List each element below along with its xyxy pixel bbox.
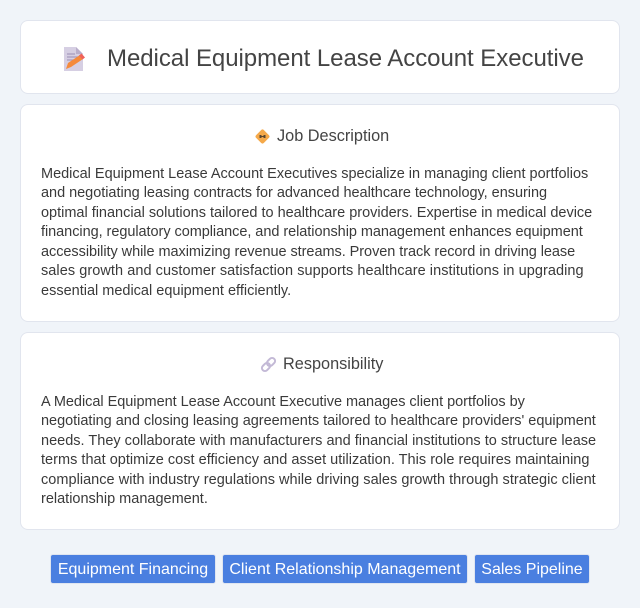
text: responsibility: needs. They collaborate with manufacturers and financial institutions to structure lease	[41, 433, 596, 449]
text: job description: and negotiating leasing contracts for advanced healthcare technology, ensuring	[41, 185, 547, 201]
text: job description	[41, 166, 592, 299]
tag: client relationship management	[222, 554, 468, 584]
icon: document with pencil	[64, 47, 85, 71]
icon: chain link	[261, 357, 276, 372]
panel: responsibility	[20, 332, 620, 530]
text: job description: Medical Equipment Lease Account Executives specialize in managing client portfolios	[41, 166, 588, 182]
text: responsibility: compliance with industry regulations while driving sales growth through strategic client	[41, 472, 596, 488]
text: job description: sales growth and customer satisfaction supports healthcare institutions in upgrading	[41, 263, 584, 279]
panel: title card	[20, 20, 620, 94]
text: job description: optimal financial solutions tailored to healthcare providers. Expertise in medical device	[41, 205, 592, 221]
heading: responsibility: Responsibility	[283, 355, 383, 373]
text: responsibility: terms that optimize cost efficiency and asset utilization. This role requires maintaining	[41, 452, 589, 468]
heading: job description: Job Description	[277, 127, 389, 145]
text: job description: essential medical equipment efficiently.	[41, 283, 291, 299]
title: Medical Equipment Lease Account Executive	[107, 45, 584, 72]
text: responsibility: relationship management.	[41, 491, 208, 507]
text: job description: accessibility while maximizing revenue streams. Proven track record in driving lease	[41, 244, 575, 260]
tag: sales pipeline	[474, 554, 590, 584]
tag: equipment financing	[50, 554, 216, 584]
tag: sales pipeline: Sales Pipeline	[481, 561, 583, 578]
text: responsibility: A Medical Equipment Lease Account Executive manages client portfolios by	[41, 394, 525, 410]
tag: client relationship management: Client Relationship Management	[229, 561, 461, 578]
text: responsibility: negotiating and closing leasing agreements tailored to healthcare providers' equipment	[41, 413, 596, 429]
panel: job description	[20, 104, 620, 322]
text: job description: financing, regulatory compliance, and relationship management enhances equipment	[41, 224, 583, 240]
icon: diamond sign	[256, 129, 270, 144]
tag: equipment financing: Equipment Financing	[58, 561, 208, 578]
